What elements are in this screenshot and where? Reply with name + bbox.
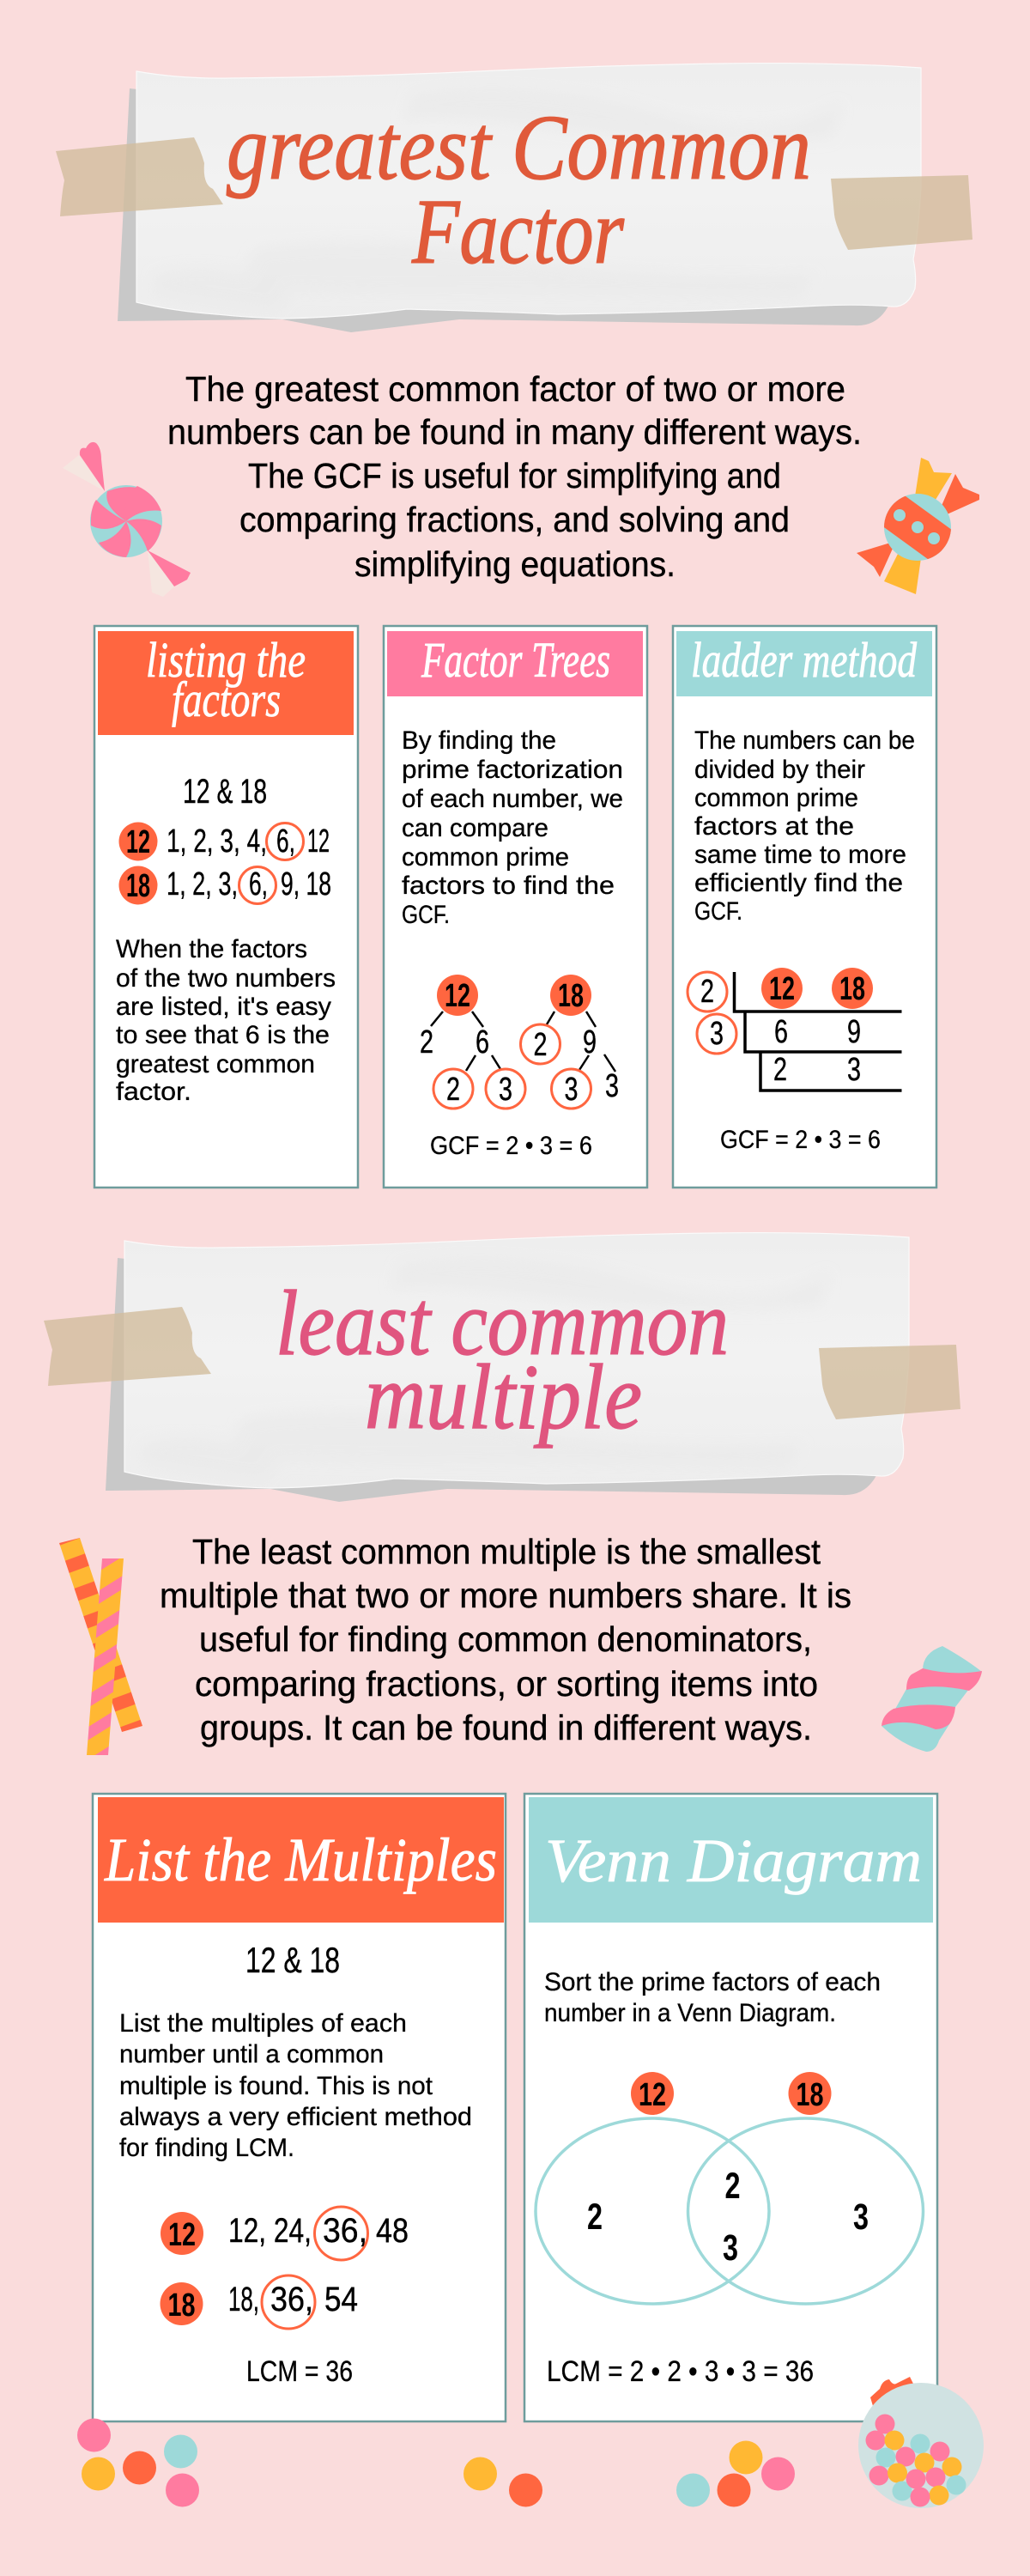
header: list the multiples <box>98 1797 504 1923</box>
chart: factor trees of 12 and 18: 18 <box>558 978 584 1014</box>
text: ladder explanation: GCF. <box>694 897 742 926</box>
icon: gumball jar <box>858 2377 984 2508</box>
factor list: 12: 12 <box>126 824 150 860</box>
text: ladder explanation: factors at the <box>694 812 854 841</box>
heading: ladder method: ladder method <box>691 632 918 688</box>
chart: ladder diagram <box>688 968 901 1091</box>
formula: lcm venn: LCM = 2 • 2 • 3 • 3 = 36 <box>547 2355 814 2388</box>
multiples list: 18: 36, <box>270 2281 313 2318</box>
intro paragraph: lcm: groups. It can be found in different ways. <box>200 1708 812 1747</box>
factor list: 18: 1, 2, 3, <box>167 866 238 902</box>
factor list: 12: 6, <box>276 823 295 860</box>
chart: ladder diagram: 6 <box>774 1014 788 1050</box>
title: least common multiple: multiple <box>365 1346 642 1449</box>
multiples list: 18: 18 <box>168 2287 196 2324</box>
panel: factor trees <box>384 626 647 1188</box>
formula: gcf tree: GCF = 2 • 3 = 6 <box>430 1132 592 1160</box>
icon: twisted marshmallow <box>882 1646 982 1752</box>
chart: factor trees of 12 and 18: 3 <box>499 1072 512 1108</box>
candies: bottom right dots <box>676 2440 795 2507</box>
heading: listing the factors <box>146 632 306 727</box>
chart: venn diagram of prime factors: 3 <box>853 2196 869 2238</box>
multiples list: 18: 18, <box>228 2281 259 2318</box>
panel: listing the factors <box>94 626 358 1188</box>
text: listing explanation: to see that 6 is the <box>116 1021 330 1049</box>
text: venn explanation: Sort the prime factors of each <box>544 1968 881 1996</box>
heading: venn diagram: Venn Diagram <box>545 1826 922 1895</box>
header: factor trees <box>387 631 643 696</box>
paper note: greatest common factor <box>118 64 921 332</box>
formula: lcm list: LCM = 36 <box>246 2355 353 2388</box>
chart: factor trees of 12 and 18: 3 <box>605 1068 619 1104</box>
text: ladder explanation: divided by their <box>694 756 865 784</box>
text: factor trees explanation: factors to find the <box>402 872 615 900</box>
heading: factor trees: Factor Trees <box>421 632 610 688</box>
multiples list: 18: 54 <box>324 2281 358 2318</box>
text: ladder explanation: efficiently find the <box>694 869 903 897</box>
numbers: 12 and 18: 12 & 18 <box>245 1940 340 1980</box>
tape: right lower <box>819 1345 960 1419</box>
panel: venn diagram <box>524 1794 937 2421</box>
chart: ladder diagram: 12 <box>769 971 795 1007</box>
title: least common multiple: least common <box>276 1273 729 1375</box>
text: factor trees explanation: can compare <box>402 814 548 842</box>
text: listing explanation: When the factors <box>116 935 307 963</box>
chart: factor trees of 12 and 18: 6 <box>476 1024 489 1060</box>
chart: venn diagram of prime factors <box>536 2072 924 2304</box>
icon: wrapped candy <box>857 458 979 594</box>
chart: factor trees of 12 and 18: 2 <box>534 1027 548 1063</box>
chart: ladder diagram: 3 <box>847 1052 861 1088</box>
heading: listing the factors: factors <box>172 671 281 727</box>
candies: bottom middle dots <box>464 2458 542 2507</box>
text: factor trees explanation: prime factorization <box>402 756 623 784</box>
multiples list: 18 <box>160 2275 358 2329</box>
icon: candy sticks <box>59 1538 142 1755</box>
intro paragraph: gcf: comparing fractions, and solving and <box>239 500 790 539</box>
intro paragraph: lcm: comparing fractions, or sorting items into <box>195 1664 818 1704</box>
multiples list: 12: 36, <box>323 2212 367 2250</box>
text: listing explanation <box>116 935 336 1106</box>
numbers: 12 and 18: 12 & 18 <box>183 773 267 811</box>
intro paragraph: gcf: numbers can be found in many different ways. <box>167 412 862 452</box>
intro paragraph: gcf: The greatest common factor of two or more <box>185 369 845 409</box>
text: multiples explanation: multiple is found. This is not <box>119 2072 433 2100</box>
title: greatest common factor: greatest Common <box>227 97 811 199</box>
text: listing explanation: are listed, it's easy <box>116 993 331 1021</box>
factor list: 12 <box>118 823 330 860</box>
text: factor trees explanation: common prime <box>402 843 569 872</box>
tape: left lower <box>44 1307 211 1386</box>
paper note: least common multiple <box>106 1233 909 1502</box>
factor list: 12: 12 <box>307 823 330 860</box>
panel: ladder method <box>673 626 936 1188</box>
chart: ladder diagram: 2 <box>773 1052 787 1088</box>
factor list: 18 <box>118 866 331 905</box>
text: factor trees explanation: By finding the <box>402 726 556 755</box>
chart: ladder diagram: 9 <box>847 1014 861 1050</box>
chart: venn diagram of prime factors: 3 <box>723 2227 738 2269</box>
chart: factor trees of 12 and 18: 12 <box>445 978 470 1014</box>
title: greatest common factor <box>227 97 811 283</box>
chart: venn diagram of prime factors: 2 <box>724 2166 740 2207</box>
header: ladder method <box>676 631 932 696</box>
chart: factor trees of 12 and 18: 2 <box>420 1024 433 1060</box>
text: venn explanation <box>544 1968 881 2027</box>
candies: bottom left dots <box>77 2418 199 2507</box>
text: factor trees explanation: GCF. <box>402 901 450 929</box>
text: ladder explanation: same time to more <box>694 841 906 869</box>
intro paragraph: lcm: The least common multiple is the smallest <box>192 1532 821 1571</box>
text: multiples explanation: always a very efficient method <box>119 2103 472 2131</box>
text: ladder explanation: The numbers can be <box>694 726 915 755</box>
text: ladder explanation: common prime <box>694 784 858 812</box>
intro paragraph: lcm: useful for finding common denominators, <box>199 1619 812 1659</box>
multiples list: 12 <box>161 2207 409 2260</box>
text: multiples explanation: List the multiples of each <box>119 2009 407 2038</box>
text: listing explanation: factor. <box>116 1078 191 1106</box>
chart: factor trees of 12 and 18: 3 <box>565 1072 579 1108</box>
tape: left <box>56 137 223 216</box>
chart: factor trees of 12 and 18 <box>420 975 619 1109</box>
factor list: 12: 1, 2, 3, 4, <box>167 823 267 860</box>
header: venn diagram <box>529 1797 933 1923</box>
tape: right <box>831 175 972 250</box>
chart: venn diagram of prime factors: 2 <box>587 2196 603 2238</box>
chart: ladder diagram: 3 <box>710 1016 724 1052</box>
icon: swirl candy <box>63 442 191 597</box>
text: ladder explanation <box>694 726 915 926</box>
intro paragraph: gcf: simplifying equations. <box>354 544 676 584</box>
factor list: 18: 6, <box>249 866 268 902</box>
formula: gcf ladder: GCF = 2 • 3 = 6 <box>720 1126 881 1154</box>
header: listing the factors <box>98 631 354 735</box>
text: factor trees explanation <box>402 726 623 929</box>
chart: ladder diagram: 2 <box>700 974 714 1010</box>
text: venn explanation: number in a Venn Diagram. <box>544 1999 836 2027</box>
title: least common multiple <box>276 1273 729 1449</box>
text: multiples explanation <box>119 2009 472 2162</box>
chart: venn diagram of prime factors: 12 <box>639 2077 666 2113</box>
intro paragraph: gcf: The GCF is useful for simplifying and <box>248 456 781 495</box>
chart: ladder diagram: 18 <box>839 971 865 1007</box>
factor list: 18: 9, 18 <box>281 866 331 902</box>
chart: factor trees of 12 and 18: 2 <box>446 1072 460 1108</box>
multiples list: 12: 12, 24, <box>228 2212 312 2250</box>
heading: list the multiples: List the Multiples <box>104 1826 497 1894</box>
text: factor trees explanation: of each number, we <box>402 785 623 813</box>
factor list: 18: 18 <box>126 868 150 904</box>
intro paragraph: lcm: multiple that two or more numbers share. It is <box>160 1576 851 1615</box>
intro paragraph: gcf <box>167 369 862 584</box>
intro paragraph: lcm <box>160 1532 851 1747</box>
text: listing explanation: greatest common <box>116 1050 315 1078</box>
text: multiples explanation: for finding LCM. <box>119 2134 294 2162</box>
chart: factor trees of 12 and 18: 9 <box>583 1024 597 1060</box>
panel: list the multiples <box>93 1794 506 2421</box>
text: multiples explanation: number until a common <box>119 2040 384 2069</box>
chart: venn diagram of prime factors: 18 <box>797 2077 824 2113</box>
heading: listing the factors: listing the <box>146 632 306 688</box>
title: greatest common factor: Factor <box>411 181 625 283</box>
text: listing explanation: of the two numbers <box>116 964 336 993</box>
multiples list: 12: 48 <box>376 2212 409 2250</box>
multiples list: 12: 12 <box>168 2217 196 2253</box>
